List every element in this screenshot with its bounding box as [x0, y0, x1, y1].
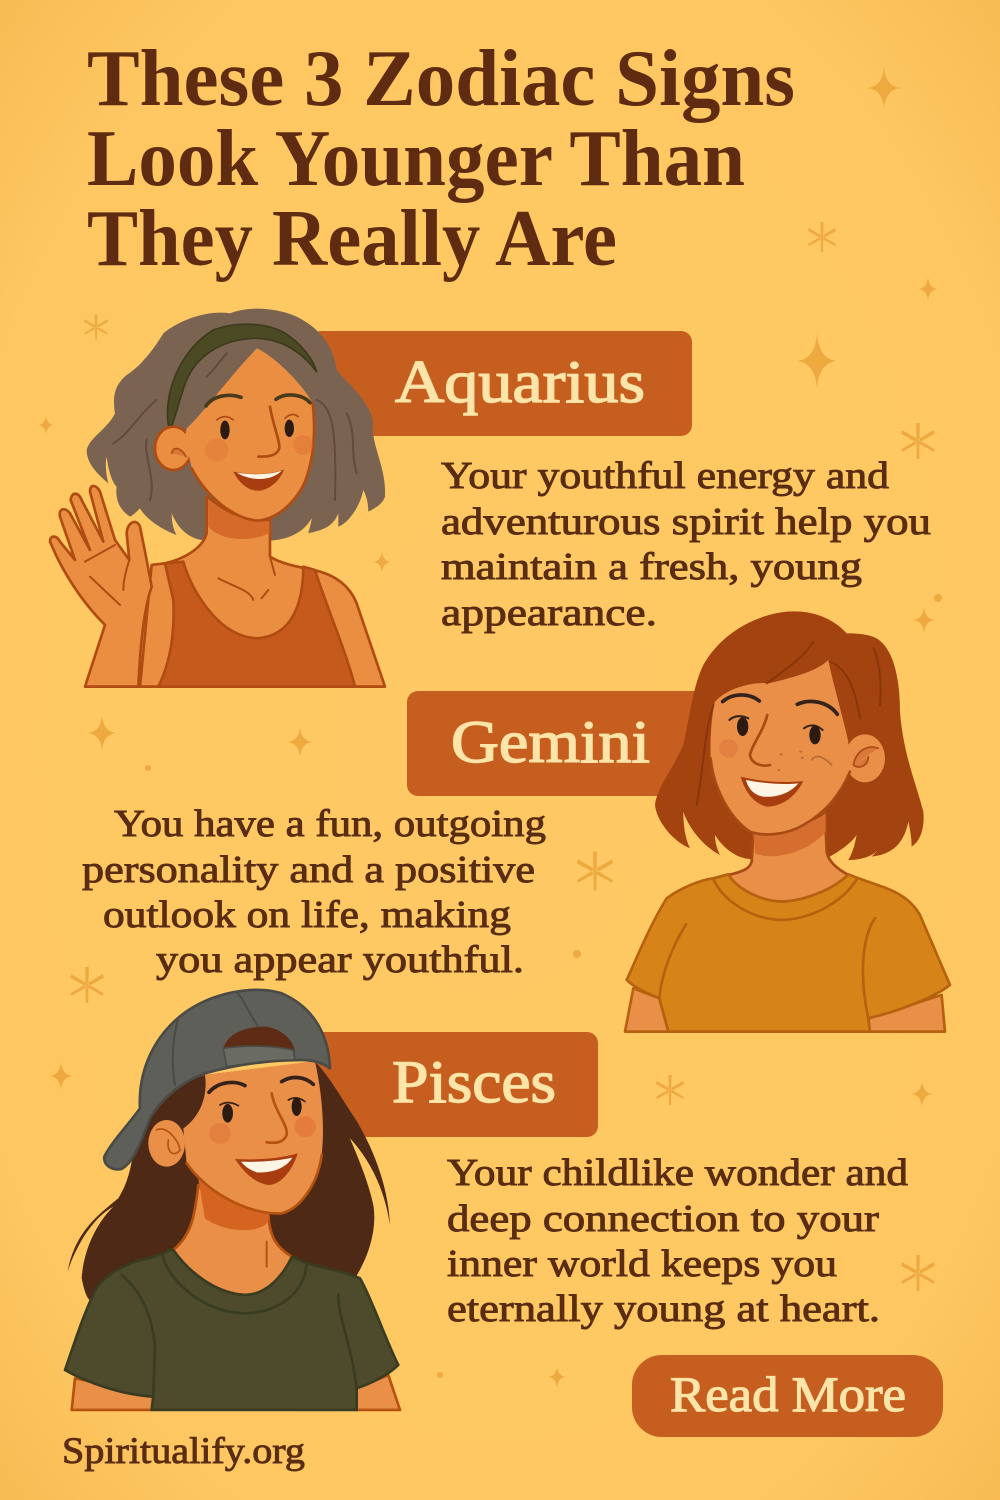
button: Read More: Read More [670, 1366, 906, 1422]
illustration: Gemini woman smiling [625, 611, 950, 1032]
footer: site name: Spiritualify.org [62, 1431, 305, 1472]
illustration: Aquarius woman waving [50, 309, 385, 687]
text block: Aquarius description [441, 455, 931, 634]
text block: Gemini description: you appear youthful. [156, 939, 524, 981]
title: They Really Are [87, 195, 617, 283]
panel: Aquarius banner: Aquarius [395, 349, 645, 415]
panel: Gemini banner [407, 691, 707, 796]
button: Read More [632, 1355, 943, 1437]
decorative stars [38, 67, 942, 1388]
panel: Pisces banner [310, 1032, 598, 1137]
text block: Aquarius description: maintain a fresh, young [441, 546, 862, 588]
text block: Gemini description: personality and a positive [82, 849, 535, 891]
text block: Pisces description: inner world keeps you [447, 1243, 837, 1285]
text block: Pisces description: deep connection to your [447, 1198, 879, 1240]
text block: Aquarius description: Your youthful energy and [441, 455, 889, 497]
text block: Gemini description: You have a fun, outgoing [114, 803, 546, 845]
text block: Gemini description: outlook on life, making [103, 894, 511, 936]
text block: Pisces description: Your childlike wonder and [447, 1152, 908, 1194]
text block: Pisces description: eternally young at heart. [447, 1288, 880, 1330]
text block: Aquarius description: appearance. [441, 592, 657, 634]
text block: Aquarius description: adventurous spirit help you [441, 501, 931, 543]
panel: Aquarius banner [310, 331, 692, 436]
text block: Pisces description [447, 1152, 908, 1330]
title: Look Younger Than [87, 115, 745, 203]
panel: Gemini banner: Gemini [451, 709, 650, 775]
title: These 3 Zodiac Signs [87, 35, 795, 123]
panel: Pisces banner: Pisces [392, 1049, 556, 1115]
title [87, 35, 795, 283]
text block: Gemini description [82, 803, 546, 981]
illustration: Pisces woman in backwards cap [65, 990, 400, 1410]
